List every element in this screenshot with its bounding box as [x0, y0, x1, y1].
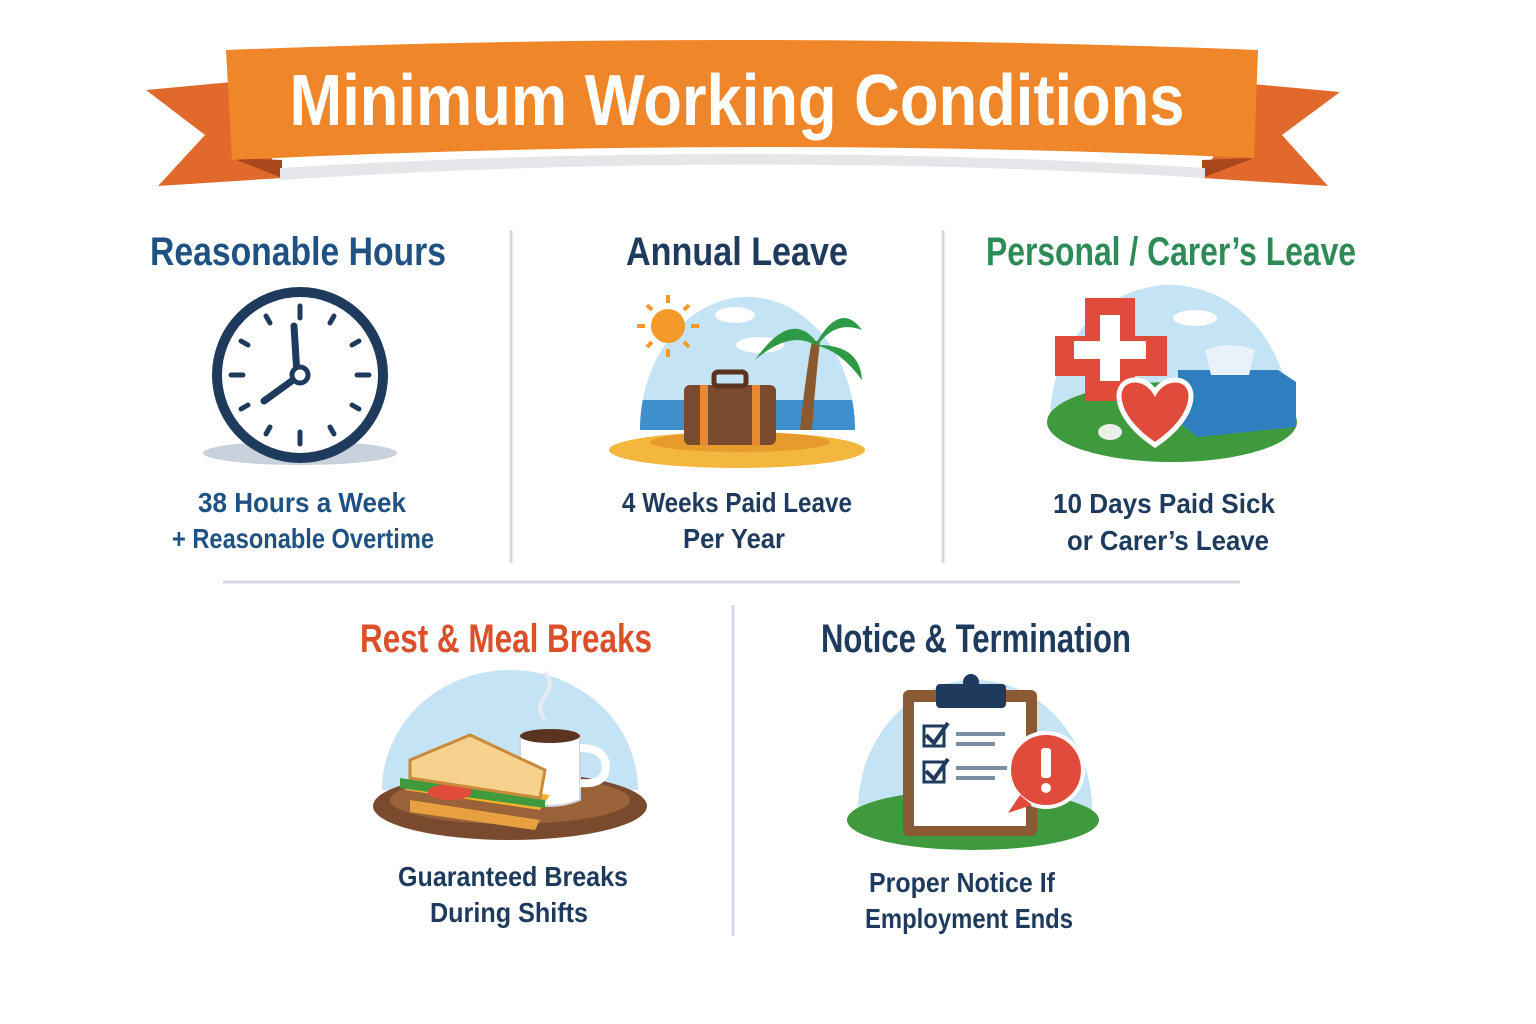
panel: rest breaks: During Shifts [430, 897, 588, 928]
text: sick leave: 10 Days Paid Sick [1053, 488, 1275, 519]
heading: rest breaks: Rest & Meal Breaks [360, 617, 652, 661]
heading: notice: Notice & Termination [821, 617, 1131, 661]
icon: sandwich and coffee [373, 670, 647, 840]
heading: reasonable hours: Reasonable Hours [150, 230, 446, 274]
panel: reasonable hours: + Reasonable Overtime [172, 523, 434, 554]
banner [146, 40, 1340, 186]
panel: notice: Employment Ends [865, 903, 1073, 934]
icon: island [609, 295, 865, 468]
panel: notice [821, 617, 1131, 934]
panel: personal leave: or Carer’s Leave [1067, 525, 1269, 556]
text: breaks: Guaranteed Breaks [398, 861, 628, 892]
title: Minimum Working Conditions [290, 61, 1184, 141]
panel: reasonable hours [150, 230, 446, 554]
panel: personal leave [986, 230, 1356, 556]
panel: annual leave: Per Year [683, 523, 785, 554]
icon: clock [203, 292, 397, 465]
text: leave: 4 Weeks Paid Leave [622, 487, 852, 518]
heading: annual leave: Annual Leave [626, 230, 848, 274]
icon: medical [1047, 285, 1297, 462]
panel: rest breaks [360, 617, 652, 928]
heading: personal leave: Personal / Carer’s Leave [986, 230, 1356, 274]
text: hours: 38 Hours a Week [198, 487, 406, 518]
panel: annual leave [609, 230, 865, 554]
icon: clipboard [847, 674, 1099, 850]
text: notice: Proper Notice If [869, 867, 1056, 898]
